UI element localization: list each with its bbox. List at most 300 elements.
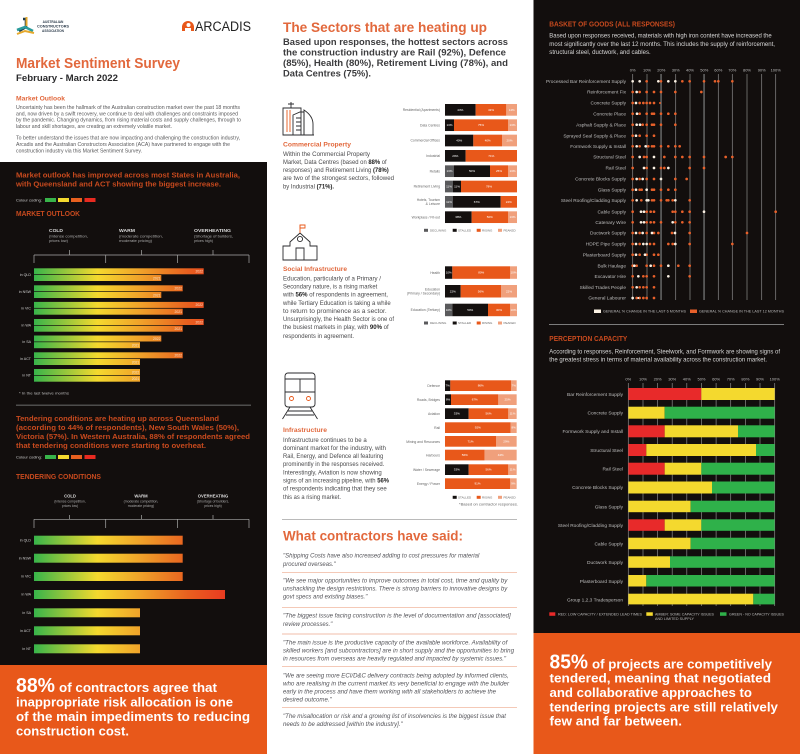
text block: infrastructure: Infrastructure continues to be a [283,437,367,444]
text block: sectors intro [283,37,508,79]
dot plot: basket of goods: Structural Steel [593,155,626,161]
text block: contractor quotes: skilled workers [and subcontractors] are in short supply and the opportunities to bring [283,648,515,655]
chart: infrastructure stacked bars: Water / Sewerage [413,468,440,472]
chart: infrastructure stacked bars: 8% [512,426,516,430]
dot plot: basket of goods: 90% [758,68,766,72]
bar chart: perception capacity: 60% [712,376,721,381]
chart: social infrastructure stacked bars: Health [430,271,440,275]
chart: infrastructure stacked bars: 71% [467,439,474,443]
legend: social infrastructure: STALLED [458,321,472,325]
text block: contractor quotes: "We see major opportunities to improve outcomes in total cost, time and quality by [283,577,508,584]
chart: commercial property stacked bars: 13% [509,215,516,219]
bar chart: market outlook by state: 2022 [132,370,139,374]
title: Market Sentiment Survey [16,56,180,72]
bar chart: perception capacity: 90% [756,376,764,381]
dot plot: basket of goods: Concrete Place [593,111,626,117]
bar chart: perception capacity: Bar Reinforcement Supply [567,392,624,398]
text block: commercial property [283,151,394,190]
heading: commercial property: Commercial Property [283,142,351,148]
chart: commercial property stacked bars: 50% [469,169,475,173]
bar chart: market outlook by state: 2021 [174,327,182,331]
dot plot: basket of goods: Ductwork Supply [590,231,627,237]
chart: commercial property stacked bars: 14% [509,108,515,112]
chart: infrastructure stacked bars: 33% [454,468,460,472]
text block: contractor quotes: govt specs and existing biases." [283,594,368,601]
chart: commercial property stacked bars: Hotels, Tourism [417,198,440,202]
heading: market outlook has improved [15,171,240,189]
legend: commercial: RISING [482,228,493,232]
text block: basket intro: structural steel, ductwork, and cables. [549,49,651,56]
dot plot: basket of goods: 70% [728,68,737,72]
bar chart: market outlook by state: in WA [22,323,32,327]
chart: social infrastructure stacked bars: 56% [478,289,484,293]
bar chart: perception capacity: Plasterboard Supply [580,579,624,585]
text block: infrastructure: this as a rising market. [283,494,341,501]
legend: infrastructure: STALLED [458,496,472,500]
legend: perception capacity: AMBER: SOME CAPACITY ISSUES [655,612,715,616]
bar chart: tendering conditions by state: in QLD [20,538,31,542]
chart: infrastructure stacked bars: 56% [485,468,492,472]
callout: 88% of contractors: of the main impediments to reducing [16,710,250,724]
text block: basket intro: Based upon responses received, materials with high iron content have increased the [549,32,772,40]
dot plot: basket of goods: Steel Roofing/Cladding Supply [561,198,627,204]
bar chart: perception capacity: 100% [770,376,780,381]
bar chart: perception capacity: 10% [639,376,647,381]
legend: social infrastructure: RISING [482,321,493,325]
text block: sectors intro: (85%), Health (80%), Retirement Living (78%), and [283,58,508,68]
legend: basket of goods [594,310,785,314]
text block: commercial property: are two of the strongest sectors, followed [283,175,394,182]
text block: contractor quotes: "The main issue is the productive capacity of the available workforce. Availability of [283,640,509,647]
heading: tendering conditions statement [16,414,250,450]
bar chart: perception capacity: 70% [727,376,735,381]
chart: commercial property stacked bars: Retirement Living [414,185,440,189]
icon: train [282,373,318,419]
chart labels: cold warm overheating: WARM [134,494,148,499]
chart: infrastructure stacked bars: 7% [446,384,450,388]
chart: commercial property stacked bars: & Leisure [426,202,440,206]
chart: infrastructure stacked bars: 92% [475,426,481,430]
bar chart: perception capacity: 80% [741,376,750,381]
text block: contractor quotes: "Shipping Costs have also increased adding to cost pressures for material [283,553,480,560]
chart: commercial property stacked bars: 38% [455,215,462,219]
bar chart: perception capacity: Structural Steel [590,448,623,454]
chart: commercial property stacked bars: 11% [446,185,452,189]
callout: 88% of contractors: inappropriate risk allocation is one [16,696,233,710]
bar chart: tendering conditions by state: in SA [22,611,32,615]
bar chart: market outlook by state: 2022 [174,354,182,358]
legend: colour coding [16,198,96,202]
dot plot: basket of goods: Concrete Blocks Supply [575,177,627,183]
dot plot: basket of goods: Reinforcement Fix [587,90,627,96]
text block: contractor quotes: "The misallocation or risk and a growing list of insolvencies is the biggest issue that [283,713,506,720]
callout: 85% of projects: of projects are competitively [592,657,772,671]
heading: what contractors have said: What contractors have said: [283,528,463,544]
text block: outlook intro: To better understand the issues that are now impacting and challenging the construction industry, [16,136,240,142]
text block: infrastructure: signs of an increasing pipeline, with 56% [283,478,389,484]
chart: commercial property stacked bars: 11% [446,200,452,204]
text block: infrastructure: dominant market for the industry, with [283,445,386,452]
chart: infrastructure stacked bars: 67% [472,398,478,402]
bar chart: market outlook by state: 2021 [132,377,139,381]
text block: social infrastructure [282,276,394,340]
legend: infrastructure: RISING [482,496,493,500]
text block: infrastructure: Interestingly, Aviation is now showing [283,470,382,476]
chart: infrastructure stacked bars: 44% [498,453,504,457]
dot plot: basket of goods: Excavator Hire [595,274,626,280]
dot plot: basket of goods: Catenary Wire [595,220,626,226]
dot plot: basket of goods: Bulk Haulage [597,263,626,269]
panel: introduction [16,17,251,154]
logo: Australian Constructors Association [17,17,69,34]
legend: commercial: DECLINING [430,228,447,232]
chart labels: cold warm overheating: prices low) [62,504,78,508]
dot plot: basket of goods: 0% [630,68,636,72]
text block: social infrastructure: Education, particularly of a Primary / [283,276,381,282]
heading: market outlook: Market Outlook [16,96,65,102]
bar chart: tendering conditions by state [19,536,225,653]
chart: commercial property stacked bars: 13% [509,169,516,173]
text block: perception intro: According to responses, Reinforcement, Steelwork, and Formwork are showing signs of [549,348,780,356]
heading: basket of goods: BASKET OF GOODS (ALL RESPONSES) [549,22,675,28]
chart: infrastructure stacked bars: Rail [434,426,440,430]
panel: basket of goods and perception capacity [534,0,800,633]
callout: 88% of contractors: construction cost. [16,724,129,738]
chart labels: cold warm overheating: OVERHEATING [198,494,228,499]
text block: commercial property: Within the Commercial Property [283,151,371,158]
text block: social infrastructure: the busiest markets in play, with 90% of [283,324,389,331]
chart: social infrastructure stacked bars: 30% [496,308,502,312]
chart: commercial property stacked bars: Industrial [426,154,440,158]
chart: social infrastructure stacked bars: 50% [467,308,474,312]
callout: 88% of contractors: 88% [16,675,55,697]
chart labels: cold warm overheating: (Intense competition, [49,234,88,238]
legend: colour coding [16,455,96,460]
legend: perception capacity [549,612,785,621]
text block: sectors intro: Data Centres (75%). [283,69,371,79]
chart: infrastructure stacked bars: Mining and Resources [406,440,440,444]
bar chart: tendering conditions by state: in WA [22,593,32,597]
chart: infrastructure stacked bars: Harbours [426,454,440,458]
bar chart: market outlook by state: 2022 [153,337,161,341]
bar chart: perception capacity: 0% [625,376,632,381]
text block: infrastructure: of respondents indicating that they see [283,486,387,492]
text block: social infrastructure: while Tertiary Education is taking a while [282,300,391,307]
icon: commercial building [283,102,314,135]
bar chart: perception capacity: Rail Steel [602,466,623,472]
chart labels: cold warm overheating: COLD [49,228,63,233]
text block: contractor quotes: review processes." [283,621,333,628]
dot plot: basket of goods: 10% [643,68,651,72]
bar chart: perception capacity: Concrete Supply [588,410,624,416]
chart: infrastructure stacked bars: 9% [511,482,516,486]
heading: social infrastructure: Social Infrastructure [283,266,347,273]
legend: perception capacity: GREEN - NO CAPACITY ISSUES [729,612,785,616]
text block: contractor quotes: needs to be addressed [within the industry]." [283,721,403,728]
chart labels: cold warm overheating [49,228,233,243]
heading: perception capacity: PERCEPTION CAPACITY [549,336,628,343]
legend: social infrastructure: DECLINING [430,321,447,325]
legend: social infrastructure: PEAKED [504,321,517,325]
text block: outlook intro: labour and skill shortages, are creating an extremely volatile market. [16,124,172,130]
chart: social infrastructure stacked bars: 10% [446,308,452,312]
bar chart: perception capacity: Concrete Blocks Supply [572,485,624,491]
bar chart: market outlook by state: 2022 [195,320,203,324]
chart labels: cold warm overheating: prices high) [204,504,222,508]
text block: basket intro [549,32,775,56]
callout: 88% of contractors: of contractors agree that [59,681,218,695]
bar chart: perception capacity: 20% [654,376,662,381]
logo: Arcadis: ARCADIS [195,19,251,34]
dot plot: basket of goods: HDPE Pipe Supply [586,242,627,248]
bar chart: tendering conditions by state: in VIC [21,574,31,578]
chart: commercial property stacked bars: 25% [496,169,502,173]
chart: social infrastructure stacked bars [407,266,517,325]
chart: commercial property stacked bars: Residential (Apartments) [403,108,440,112]
text block: sectors intro: the construction industry are Rail (92%), Defence [283,48,506,58]
bar chart: market outlook by state: 2022 [174,287,182,291]
chart: social infrastructure stacked bars: 10% [446,271,452,275]
dot plot: basket of goods: Formwork Supply & Install [570,144,626,150]
bar chart: market outlook by state: in ACT [20,357,32,361]
text block: outlook intro: by the pandemic. Changing dynamics, from rising material costs and supply challenges, through to [16,118,241,124]
text block: commercial property: Market, Data Centres (based on 88% of [283,159,387,166]
chart: commercial property stacked bars [403,104,517,232]
dot plot: basket of goods: 20% [657,68,666,72]
chart: commercial property stacked bars: 71% [488,154,495,158]
chart: infrastructure stacked bars: 91% [474,482,481,486]
chart: social infrastructure stacked bars: 80% [478,271,485,275]
legend: colour coding: Colour coding: [16,198,42,202]
chart: infrastructure stacked bars: Aviation [428,412,440,416]
chart labels: cold warm overheating: (moderate competition, [119,234,163,238]
dot plot: basket of goods: Rail Steel [605,166,626,172]
heading: market outlook chart: MARKET OUTLOOK [16,211,80,218]
date: February - March 2022 [16,73,118,84]
chart: commercial property stacked bars: 75% [478,123,484,127]
text block: outlook intro: and, now driven by a swift recovery, we continue to deal with challenges and constraints imposed [16,111,238,117]
legend: basket of goods: GENERAL % CHANGE IN THE LAST 6 MONTHS [603,310,687,314]
text block: perception intro [549,348,780,364]
dot plot: basket of goods: Glass Supply [598,187,627,193]
bar chart: perception capacity: 50% [697,376,706,381]
chart: commercial property stacked bars: 11% [454,185,460,189]
bar chart: market outlook by state: 2021 [132,360,139,364]
bar chart: market outlook by state: in VIC [21,306,31,310]
dot plot: basket of goods: Cable Supply [597,209,627,215]
bar chart: perception capacity: Ductwork Supply [587,560,624,566]
dot plot: basket of goods: 50% [700,68,709,72]
heading: tendering conditions statement: (according to 44% of respondents), New South Wales (50%), [16,423,239,432]
chart: infrastructure stacked bars: 56% [462,453,468,457]
heading: the sectors that are heating up: The Sectors that are heating up [283,20,487,35]
bar chart: perception capacity: Cable Supply [594,542,624,548]
chart: commercial property stacked bars: 43% [457,108,464,112]
legend: perception capacity: RED: LOW CAPACITY / EXTENDED LEAD TIMES [558,612,643,616]
bar chart: perception capacity: 30% [668,376,677,381]
chart labels: cold warm overheating: (Intense competition, [54,499,86,503]
text block: outlook intro: Uncertainty has been the hallmark of the Australian construction market over the past 18 months [16,105,240,111]
dot plot: basket of goods: 100% [771,68,781,72]
chart: infrastructure stacked bars: 7% [512,384,516,388]
chart: infrastructure stacked bars: 29% [503,439,510,443]
chart: commercial property stacked bars: 67% [474,200,480,204]
chart: infrastructure stacked bars: 86% [478,384,484,388]
dot plot: basket of goods [546,68,781,302]
bar chart: tendering conditions by state: in ACT [20,629,32,633]
chart labels: cold warm overheating: OVERHEATING [194,228,231,233]
text block: infrastructure [283,437,389,501]
bar chart: perception capacity [558,376,780,606]
text block: outlook intro: Arcadis and the Australian Constructors Association (ACA) have partnered to engage with the [16,142,230,148]
chart: infrastructure stacked bars: 56% [485,412,492,416]
text block: sectors intro: Based upon responses, the hottest sectors across [283,37,508,47]
chart: infrastructure stacked bars: Energy / Power [417,482,441,486]
dot plot: basket of goods: Asphalt Supply & Place [576,122,626,128]
legend: colour coding: Colour coding: [16,456,42,460]
legend: infrastructure [453,496,517,500]
chart: infrastructure stacked bars: 8% [446,398,450,402]
legend: basket of goods: GENERAL % CHANGE IN THE LAST 12 MONTHS [699,310,785,314]
text block: contractor quotes: who are realising in the current market its very beneficial to engage with the builder [283,680,510,687]
text block: contractor quotes: unshackling the design restrictions. There is strong barriers to innovative designs by [283,585,508,592]
text block: social infrastructure: Unsurprisingly, the Health Sector is one of [283,316,394,323]
callout: 85% of projects: tendered, meaning that negotiated [550,672,771,686]
bar chart: market outlook by state: 2021 [174,310,182,314]
chart: commercial property stacked bars: 20% [506,139,513,143]
legend: commercial: STALLED [458,228,472,232]
bar chart: market outlook by state [19,268,204,382]
chart: commercial property stacked bars: 13% [446,123,453,127]
chart: commercial property stacked bars: 13% [446,169,453,173]
bar chart: market outlook by state: in QLD [20,273,31,277]
text block: perception intro: the greatest stress in terms of material availability across the construction market. [549,356,767,364]
chart labels: cold warm overheating: prices low) [49,239,68,243]
bar chart: tendering conditions by state: in NT [22,647,32,651]
logo: Australian Constructors Association: CONSTRUCTORS [37,24,69,28]
callout: 85% of projects: few and far between. [550,714,682,728]
text block: contractor quotes [282,553,515,728]
callout: 88% of contractors [0,665,267,754]
chart: commercial property stacked bars: Retails [430,169,440,173]
dot plot: basket of goods: Plasterboard Supply [583,252,627,258]
text block: contractor quotes: "The biggest issue facing construction is the level of documentation and [associated] [283,613,511,620]
callout: 85% of projects: 85% [550,651,588,673]
chart: social infrastructure stacked bars: (Primary / Secondary) [407,292,440,296]
chart labels: cold warm overheating: COLD [64,494,76,499]
chart labels: cold warm overheating: moderate pricing) [119,239,152,243]
bar chart: market outlook by state: 2021 [132,344,139,348]
text block: infrastructure: prominently in the responses received. [283,461,384,468]
text block: social infrastructure: respondents in agreement. [283,333,354,340]
heading: market outlook has improved: with Queensland and ACT showing the biggest increase. [15,180,221,189]
legend: perception capacity: AND LIMITED SUPPLY [655,617,695,621]
bar chart: market outlook by state: in NSW [19,290,32,294]
callout: 85% of projects [534,633,800,754]
legend: infrastructure: PEAKED [504,496,517,500]
bar chart: market outlook by state: 2021 [153,276,161,280]
bar chart: perception capacity: Group 1,2,3 Tradesperson [567,598,623,604]
chart labels: cold warm overheating: (moderate competition, [124,499,158,503]
logo: Australian Constructors Association: AUSTRALIAN [43,20,64,24]
text block: social infrastructure: Secondary nature, is a rising market [283,284,377,291]
bar chart: perception capacity: Formwork Supply and Install [562,429,623,435]
chart labels: cold warm overheating: moderate pricing) [128,504,154,508]
callout: 85% of projects: and collaborative approaches to [550,686,752,700]
chart: commercial property stacked bars: 43% [488,108,494,112]
chart: social infrastructure stacked bars: 10% [510,271,517,275]
chart: social infrastructure stacked bars: Education [425,288,440,292]
chart: commercial property stacked bars: 78% [486,185,492,189]
bar chart: market outlook by state: in SA [22,340,32,344]
chart: social infrastructure stacked bars: 22% [450,289,456,293]
dot plot: basket of goods: Processed Bar Reinforcement Supply [546,79,627,85]
logo: Australian Constructors Association: ASSOCIATION [42,29,65,33]
bar chart: market outlook by state: 2022 [195,303,203,307]
callout: 85% of projects: tendering projects are still relatively [550,700,778,714]
dot plot: basket of goods: 30% [672,68,680,72]
bar chart: perception capacity: Steel Roofing/Cladding Supply [558,523,624,529]
heading: market outlook has improved: Market outlook has improved across most States in Australia, [16,171,240,180]
text block: contractor quotes: in resources from overseas are heavily regulated and impacted by systemic issues." [283,656,507,663]
dot plot: basket of goods: 40% [686,68,694,72]
dot plot: basket of goods: Concrete Supply [591,101,627,107]
text block: social infrastructure: with 56% of respondents in agreement, [282,292,388,299]
icon: school building [283,225,317,260]
chart labels: cold warm overheating: (Shortage of builders, [194,234,233,238]
chart labels: cold warm overheating: WARM [119,228,136,233]
bar chart: perception capacity: Glass Supply [595,504,624,510]
bar chart: tendering conditions by state: in NSW [19,556,32,560]
bar chart: perception capacity: 40% [683,376,691,381]
chart: infrastructure stacked bars: 11% [510,412,516,416]
chart: social infrastructure stacked bars: 22% [506,289,512,293]
text block: commercial property: responses) and Retirement Living (78%) [283,167,389,174]
text block: social infrastructure: to return to prominence as a sector. [283,308,387,315]
footnote: * In the last twelve months [19,392,69,396]
legend: social infrastructure [424,321,517,325]
text block: outlook intro: construction industry via this Market Sentiment Survey. [16,148,142,154]
bar chart: market outlook by state: 2021 [153,293,161,297]
chart: commercial property stacked bars: 50% [487,215,493,219]
chart: commercial property stacked bars: 22% [506,200,512,204]
chart: commercial property stacked bars: Data Centres [420,123,440,127]
text block: contractor quotes: "We are seeing more ECI/D&C delivery contracts being adopted by informed clients, [283,672,509,679]
chart: commercial property stacked bars: Commercial Offices [410,139,440,143]
heading: tendering conditions statement: Tendering conditions are heating up across Queensland [16,414,219,423]
footnote: *Based on contractor responses. [459,502,518,506]
text block: commercial property: by Industrial (71%). [283,184,334,190]
bar chart: market outlook by state: in NT [22,373,32,377]
dot plot: basket of goods: General Labourer [588,296,626,302]
chart labels: cold warm overheating: prices high) [194,239,213,243]
chart: infrastructure stacked bars: 11% [510,468,516,472]
chart: commercial property stacked bars: 13% [509,123,516,127]
panel: market outlook [0,162,267,665]
heading: tendering conditions chart: TENDERING CONDITIONS [16,474,101,481]
chart: social infrastructure stacked bars: 10% [510,308,517,312]
bar chart: market outlook by state: 2022 [195,270,203,274]
text block: contractor quotes: desired outcome." [283,697,332,704]
dot plot: basket of goods: 60% [714,68,723,72]
chart: commercial property stacked bars: 40% [456,139,463,143]
chart: commercial property stacked bars: 29% [452,154,459,158]
legend: commercial: PEAKED [504,228,517,232]
dot plot: basket of goods: Sprayed Seal Supply & Place [563,133,626,139]
heading: tendering conditions statement: that tendering conditions were starting to overheat. [16,441,206,450]
dot plot: basket of goods: 80% [743,68,751,72]
text block: infrastructure: Rail, Energy, and Defence all featuring [283,453,384,460]
